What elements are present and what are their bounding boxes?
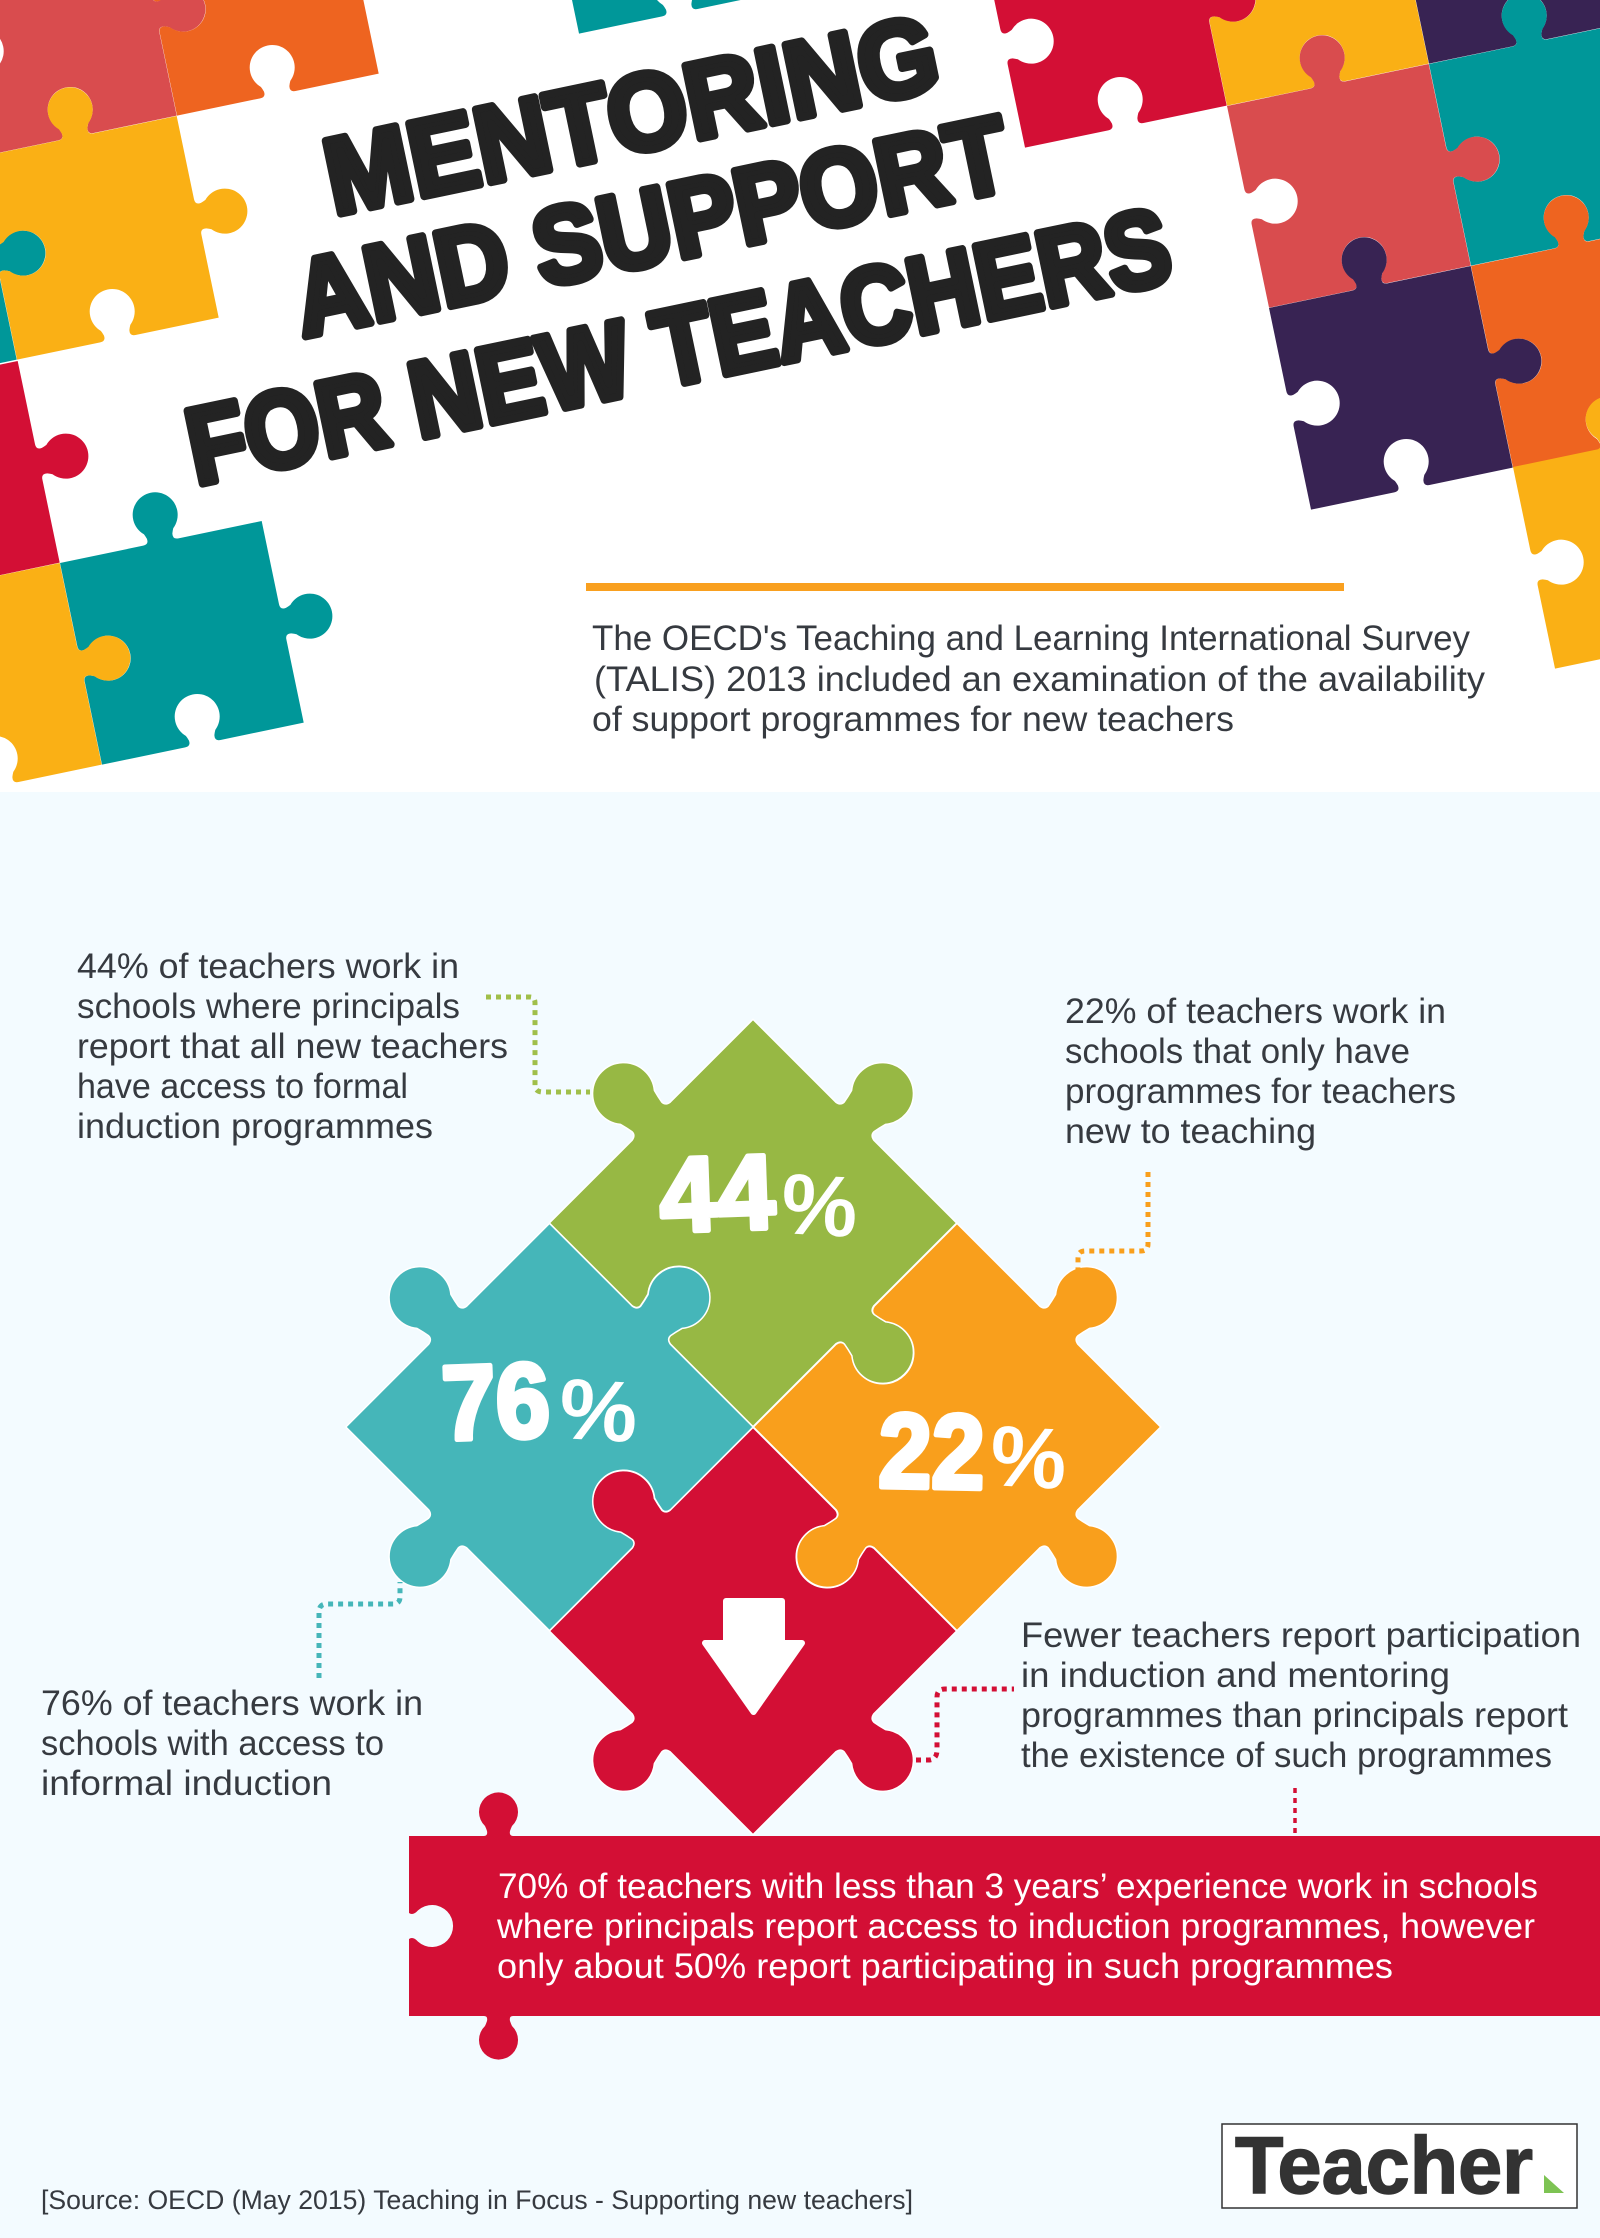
banner: red puzzle strip — [409, 1792, 1600, 2060]
callout: 44% text: schools where principals — [77, 987, 460, 1026]
intro text: of support programmes for new teachers — [592, 700, 1234, 739]
intro text: (TALIS) 2013 included an examination of the availability — [594, 660, 1486, 699]
puzzle piece: orange — [704, 1174, 1260, 1730]
puzzle cluster: lower left — [0, 302, 353, 807]
callout: fewer teachers text: programmes than principals report — [1021, 1696, 1568, 1735]
connector: red vertical dotted — [1293, 1788, 1297, 1836]
callout: 76% text: 76% of teachers work in — [41, 1684, 423, 1723]
connector: red dotted — [916, 1689, 1014, 1760]
banner text: 70% of teachers with less than 3 years’ experience work in schools — [498, 1867, 1538, 1906]
callout: 44% text: induction programmes — [77, 1107, 433, 1146]
title — [176, 0, 1181, 508]
callout: 44% text: report that all new teachers — [77, 1027, 508, 1066]
intro text — [592, 619, 1486, 739]
banner text — [496, 1867, 1538, 1986]
banner text: only about 50% report participating in such programmes — [497, 1947, 1393, 1986]
title: FOR NEW TEACHERS — [176, 184, 1181, 508]
callout: 76% text: informal induction — [41, 1764, 332, 1803]
logo: Teacher: Teacher — [1235, 2121, 1533, 2211]
puzzle piece: top centre teal — [527, 0, 830, 34]
connector: green dotted — [486, 997, 590, 1092]
callout: 44% text: 44% of teachers work in — [77, 947, 459, 986]
banner text: where principals report access to induction programmes, however — [496, 1907, 1535, 1946]
background: lower panel — [0, 792, 1600, 2238]
stat: 44%: 44 — [658, 1133, 777, 1255]
callout: 44% text — [77, 947, 508, 1146]
stat: 76% — [440, 1341, 640, 1463]
callout: 22% text: 22% of teachers work in — [1065, 992, 1446, 1031]
puzzle piece: red — [450, 1378, 1006, 1934]
callout: 22% text — [1065, 992, 1456, 1151]
stat: 44%: % — [779, 1156, 860, 1256]
intro text: The OECD's Teaching and Learning International Survey — [592, 619, 1470, 658]
icon: down arrow — [705, 1601, 802, 1712]
stat: 22%: 22 — [878, 1392, 986, 1512]
stat: 22% — [878, 1392, 1069, 1512]
connector: teal dotted — [319, 1582, 400, 1678]
stat: 44% — [658, 1133, 860, 1256]
callout: 44% text: have access to formal — [77, 1067, 408, 1106]
callout: fewer teachers text: the existence of such programmes — [1021, 1736, 1552, 1775]
callout: 22% text: schools that only have — [1065, 1032, 1410, 1071]
stat: 76%: % — [557, 1361, 640, 1461]
puzzle cluster: top right — [973, 0, 1600, 669]
callout: fewer teachers text: Fewer teachers report participation — [1021, 1616, 1581, 1655]
title: AND SUPPORT — [283, 92, 1019, 360]
connector: orange dotted — [1078, 1172, 1148, 1270]
central puzzle diamond — [247, 920, 1260, 1934]
puzzle piece: green — [500, 920, 1056, 1476]
source note: [Source: OECD (May 2015) Teaching in Focus - Supporting new teachers] — [41, 2185, 913, 2215]
callout: fewer teachers text — [1021, 1616, 1581, 1775]
callout: 22% text: new to teaching — [1065, 1112, 1316, 1151]
puzzle piece: teal — [247, 1124, 803, 1680]
divider rule — [586, 583, 1344, 591]
callout: 76% text — [41, 1684, 423, 1803]
stat: 22%: % — [988, 1408, 1069, 1508]
callout: 22% text: programmes for teachers — [1065, 1072, 1456, 1111]
puzzle cluster: top left — [0, 0, 428, 402]
stat: 76%: 76 — [440, 1341, 552, 1463]
callout: 76% text: schools with access to — [41, 1724, 384, 1763]
callout: fewer teachers text: in induction and mentoring — [1021, 1656, 1450, 1695]
